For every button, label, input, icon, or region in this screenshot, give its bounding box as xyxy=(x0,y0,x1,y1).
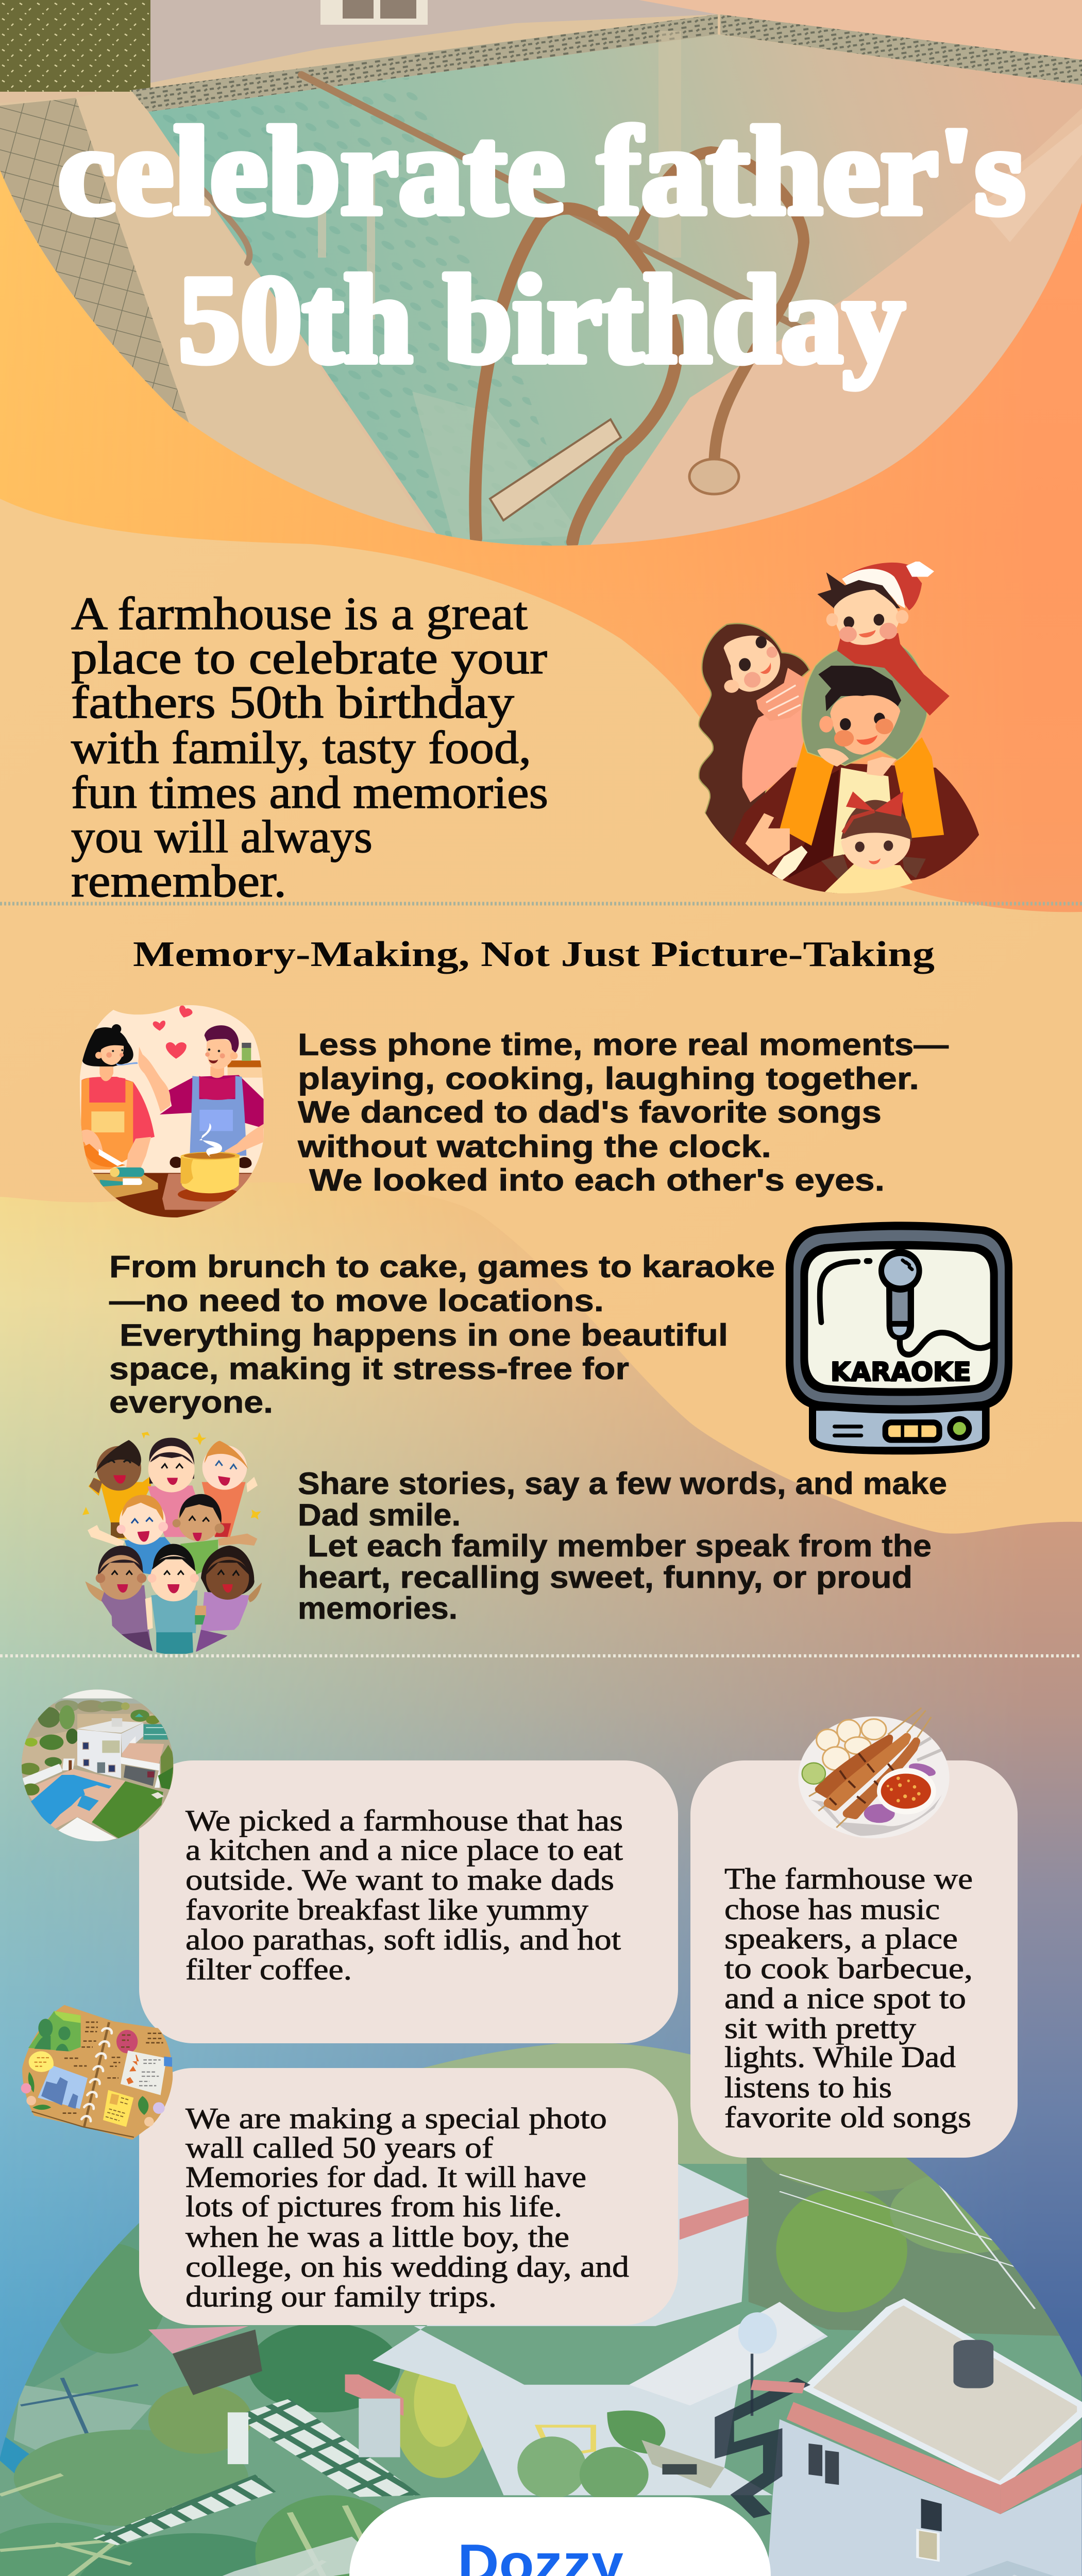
card: music and barbecue: speakers, a place xyxy=(724,1922,958,1955)
farmhouse aerial photo xyxy=(0,2040,1082,2576)
intro text block: A farmhouse is a great xyxy=(71,588,528,639)
child hat xyxy=(843,563,922,611)
spoon xyxy=(116,1062,138,1065)
skewer sticks xyxy=(809,1708,931,1827)
text block: share stories xyxy=(298,1466,947,1625)
child green sweater xyxy=(802,645,927,766)
text block: brunch to cake: Everything happens in one beautiful xyxy=(120,1318,728,1352)
stars xyxy=(192,1432,207,1445)
text block: less phone time: We looked into each other's eyes. xyxy=(309,1163,885,1197)
card: photo wall xyxy=(139,2068,678,2325)
text block: less phone time: Less phone time, more real moments— xyxy=(298,1027,949,1062)
child hands xyxy=(817,748,849,767)
middle bodies xyxy=(88,1525,125,1547)
title: 50th birthday xyxy=(178,250,905,389)
green photo xyxy=(28,2011,81,2052)
child hair and face xyxy=(817,572,900,609)
lawn xyxy=(92,1781,163,1838)
icon: farmhouse with pool xyxy=(15,1685,180,1844)
text block: less phone time: playing, cooking, laughing together. xyxy=(298,1061,919,1096)
intro text block: you will always xyxy=(71,811,373,862)
icon: couple cooking xyxy=(67,999,273,1228)
breads xyxy=(817,1719,886,1770)
card: music and barbecue: sit with pretty xyxy=(724,2011,916,2045)
title: celebrate father's xyxy=(58,101,1025,241)
child orange legs xyxy=(780,741,837,846)
intro text block: with family, tasty food, xyxy=(71,722,531,773)
sauce bowl xyxy=(877,1768,936,1815)
white note xyxy=(121,2050,166,2095)
card: music and barbecue: and a nice spot to xyxy=(724,1981,966,2015)
front bodies xyxy=(84,1581,105,1602)
table and pot xyxy=(77,1173,266,1228)
writing marks xyxy=(63,2022,163,2113)
intro text block: remember. xyxy=(71,856,286,907)
card: music and barbecue: favorite old songs xyxy=(724,2100,971,2134)
icon: barbecue plate xyxy=(798,1708,950,1838)
card: farmhouse kitchen: a kitchen and a nice place to eat xyxy=(185,1833,623,1867)
icon: group of children xyxy=(82,1432,262,1655)
gazebo xyxy=(148,2326,248,2353)
text block: less phone time xyxy=(297,1027,949,1197)
dotted divider 2 xyxy=(0,1654,1082,1657)
greenhouse xyxy=(143,1724,168,1740)
icon: karaoke screen: KARAOKE xyxy=(831,1357,971,1387)
card: farmhouse kitchen: favorite breakfast like yummy xyxy=(185,1893,588,1926)
yellow page xyxy=(103,2090,133,2127)
middle heads xyxy=(120,1498,166,1545)
rings xyxy=(81,2028,112,2121)
text block: brunch to cake: space, making it stress-free for xyxy=(109,1351,629,1386)
hearts xyxy=(166,1042,187,1059)
man arm xyxy=(138,1047,171,1112)
lime xyxy=(802,1763,825,1784)
child scarf xyxy=(837,633,950,716)
text block: share stories: Let each family member speak from the xyxy=(308,1529,932,1563)
house xyxy=(77,1721,143,1733)
skewers xyxy=(818,1738,890,1794)
text block: share stories: heart, recalling sweet, funny, or proud xyxy=(298,1560,912,1595)
dad hand xyxy=(746,813,790,865)
card: photo wall: wall called 50 years of xyxy=(185,2131,494,2164)
central building xyxy=(373,2164,828,2495)
card: photo wall: lots of pictures from his life. xyxy=(185,2190,562,2223)
icon: pool handrails xyxy=(201,75,804,542)
woman xyxy=(81,1077,155,1159)
back faces xyxy=(108,1461,130,1463)
spiral stair xyxy=(724,2381,804,2516)
card: farmhouse kitchen xyxy=(139,1760,678,2043)
section heading: Memory-Making, Not Just Picture-Taking xyxy=(133,935,935,974)
left gardens xyxy=(0,2164,152,2405)
yellow note xyxy=(29,2052,54,2072)
text block: brunch to cake: everyone. xyxy=(109,1385,273,1419)
card: music and barbecue xyxy=(690,1760,1018,2158)
card: photo wall: college, on his wedding day, and xyxy=(185,2250,629,2283)
intro text block xyxy=(71,588,548,907)
card: farmhouse kitchen: filter coffee. xyxy=(185,1953,352,1986)
text block: share stories: Dad smile. xyxy=(298,1498,461,1532)
card: farmhouse kitchen: outside. We want to make dads xyxy=(185,1863,614,1896)
card: music and barbecue: The farmhouse we xyxy=(724,1862,973,1895)
intro text block: place to celebrate your xyxy=(71,633,547,684)
peach blob background shape xyxy=(0,499,1082,1534)
onions xyxy=(864,1804,895,1823)
card: photo wall: We are making a special photo xyxy=(185,2102,607,2135)
dad hair and face xyxy=(818,666,901,711)
girl xyxy=(821,854,926,880)
deck xyxy=(26,1769,125,1831)
intro text block: fathers 50th birthday xyxy=(71,677,514,728)
intro text block: fun times and memories xyxy=(71,767,548,818)
text block: less phone time: without watching the clock. xyxy=(297,1129,771,1164)
card: photo wall: during our family trips. xyxy=(185,2280,497,2313)
main building xyxy=(759,2419,1082,2576)
blue photo xyxy=(38,2065,88,2109)
icon: memory album xyxy=(21,2005,173,2140)
fence xyxy=(22,1758,75,1788)
dotted divider 1 xyxy=(0,902,1082,906)
title xyxy=(58,101,1025,389)
card: music and barbecue: chose has music xyxy=(724,1892,940,1926)
front heads xyxy=(98,1546,143,1575)
garden path lattice xyxy=(234,2399,421,2497)
mother hair xyxy=(699,623,809,850)
back row bodies xyxy=(89,1477,151,1539)
text block: less phone time: We danced to dad's favorite songs xyxy=(298,1095,882,1129)
cutting board xyxy=(89,1174,158,1198)
card: photo wall: Memories for dad. It will have xyxy=(185,2160,586,2194)
card: music and barbecue: to cook barbecue, xyxy=(724,1952,973,1985)
card: farmhouse kitchen: aloo parathas, soft idlis, and hot xyxy=(185,1923,621,1956)
text block: brunch to cake: —no need to move locations. xyxy=(109,1283,604,1318)
lower right deck xyxy=(780,2561,1082,2576)
dad undershirt xyxy=(833,768,890,857)
white canopy xyxy=(58,1817,117,1844)
upper gardens xyxy=(345,2040,828,2164)
shelf xyxy=(228,1060,264,1067)
card: photo wall: when he was a little boy, the xyxy=(185,2220,569,2253)
man xyxy=(160,1075,264,1128)
back heads xyxy=(96,1446,141,1490)
text block: brunch to cake: From brunch to cake, games to karaoke xyxy=(109,1249,775,1284)
card: farmhouse kitchen: We picked a farmhouse that has xyxy=(185,1804,623,1837)
panel: pool photo header xyxy=(0,0,1082,567)
text block: share stories: memories. xyxy=(298,1591,458,1625)
icon: family illustration xyxy=(699,561,979,895)
logo panel xyxy=(349,2497,771,2576)
palms xyxy=(0,2523,145,2576)
leaves and flowers xyxy=(138,2096,148,2115)
mother body xyxy=(742,696,812,802)
card: music and barbecue: lights. While Dad xyxy=(724,2040,956,2074)
icon: karaoke screen xyxy=(786,1222,1012,1454)
dad jacket xyxy=(728,764,979,895)
text block: share stories: Share stories, say a few words, and make xyxy=(298,1466,947,1501)
icon: pool step xyxy=(490,419,621,520)
card: music and barbecue: listens to his xyxy=(724,2071,892,2104)
pink note xyxy=(116,2030,138,2053)
text block: brunch to cake xyxy=(109,1249,775,1419)
pool xyxy=(31,1775,112,1825)
